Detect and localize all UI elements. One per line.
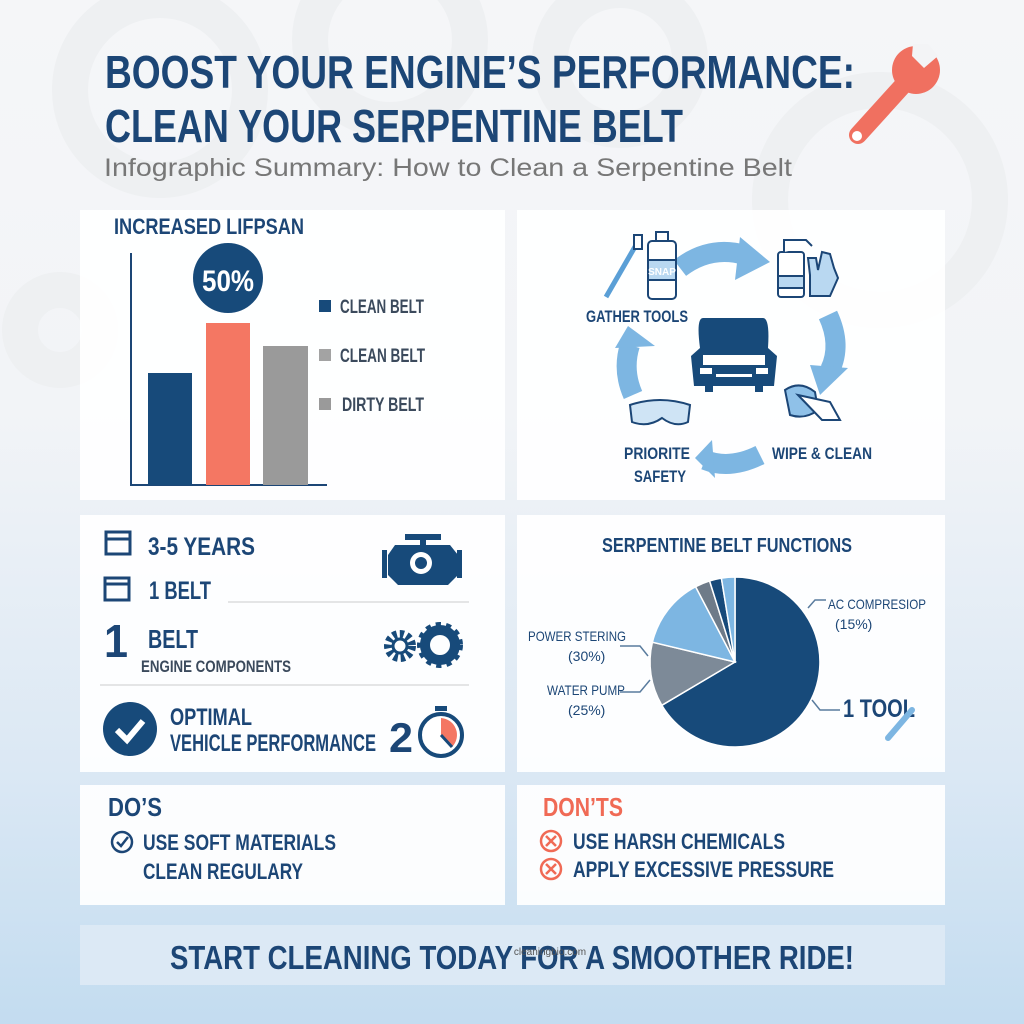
icon: goggles: [630, 400, 690, 424]
title: CLEAN YOUR SERPENTINE BELT: [105, 100, 683, 152]
don'ts list: [573, 829, 834, 882]
banner: call to action: [80, 925, 945, 985]
stat: optimal performance: OPTIMAL: [170, 704, 252, 731]
title: BOOST YOUR ENGINE’S PERFORMANCE:: [105, 46, 855, 98]
legend: DIRTY BELT: [342, 395, 424, 416]
panel: do's: [80, 785, 505, 905]
do's list: [143, 830, 336, 884]
stat: belt engine components: BELT: [148, 624, 198, 654]
title: [105, 46, 855, 152]
stat: belt engine components: ENGINE COMPONENTS: [141, 657, 291, 676]
panel: cleaning cycle: [517, 210, 945, 500]
icons: x marks: [541, 831, 561, 879]
stat: optimal performance: [170, 704, 413, 761]
subtitle: Infographic Summary: How to Clean a Serpentine Belt: [104, 154, 792, 182]
heading: increased lifespan: INCREASED LIFPSAN: [114, 214, 304, 239]
do's list: CLEAN REGULARY: [143, 859, 303, 884]
icon: brush and soap: SNAP: [648, 267, 676, 278]
icon: wrench: [852, 44, 940, 141]
legend: [319, 297, 425, 416]
icon: gears: [388, 625, 460, 665]
badge: 50%: 50%: [202, 265, 254, 298]
panel: lifespan chart: [80, 210, 505, 500]
icon: tool: [888, 710, 912, 738]
labels: cycle steps: PRIORITE: [624, 444, 690, 463]
legend: CLEAN BELT: [340, 297, 424, 318]
stat: optimal performance: VEHICLE PERFORMANCE: [170, 730, 376, 757]
bar chart: [130, 253, 327, 486]
icon: cloth hand: [785, 385, 840, 420]
banner: call to action: START CLEANING TODAY FOR A SMOOTHER RIDE!: [170, 939, 854, 976]
icon: check circle: [103, 702, 157, 756]
pie labels: (15%): [835, 616, 872, 632]
stat: optimal performance: 2: [389, 714, 413, 761]
panel: don'ts: DON’TS: [543, 792, 623, 822]
labels: cycle steps: GATHER TOOLS: [586, 307, 688, 326]
banner: call to action: cleaningbio.com: [514, 947, 586, 958]
icon: car: [691, 318, 777, 392]
arrows: cycle: [615, 237, 848, 478]
panel: don'ts: [517, 785, 945, 905]
panel: stats: [80, 515, 505, 772]
pie labels: [528, 596, 926, 718]
pie labels: (30%): [568, 648, 605, 664]
pie chart: [650, 577, 820, 747]
panel: belt functions: [517, 515, 945, 772]
stat: belt engine components: 1: [104, 615, 128, 667]
panel: do's: DO’S: [108, 792, 162, 822]
labels: cycle steps: WIPE & CLEAN: [772, 444, 872, 463]
label: 1 tool: 1 TOOL: [843, 695, 915, 723]
icon: engine: [382, 534, 462, 585]
icon: brush and soap: [606, 232, 676, 299]
legend: CLEAN BELT: [340, 346, 425, 367]
icon: calendar: [106, 532, 130, 554]
don'ts list: USE HARSH CHEMICALS: [573, 829, 785, 854]
don'ts list: APPLY EXCESSIVE PRESSURE: [573, 857, 834, 882]
icon: calendar 2: [105, 578, 129, 600]
stat: belt engine components: [104, 615, 291, 676]
icon: check: [112, 832, 132, 852]
badge: 50%: [193, 243, 263, 313]
icon: timer: [420, 706, 462, 756]
stat: 1 belt: 1 BELT: [149, 577, 211, 605]
stat: 3-5 years: 3-5 YEARS: [148, 533, 255, 561]
pie labels: POWER STERING: [528, 628, 626, 644]
pie labels: WATER PUMP: [547, 682, 625, 698]
icon: spray and glove: [778, 240, 838, 297]
do's list: USE SOFT MATERIALS: [143, 830, 336, 855]
heading: serpentine belt functions: SERPENTINE BELT FUNCTIONS: [602, 535, 852, 557]
labels: cycle steps: [586, 307, 872, 486]
labels: cycle steps: SAFETY: [634, 467, 687, 486]
pie labels: AC COMPRESIOP: [828, 596, 926, 612]
pie labels: (25%): [568, 702, 605, 718]
